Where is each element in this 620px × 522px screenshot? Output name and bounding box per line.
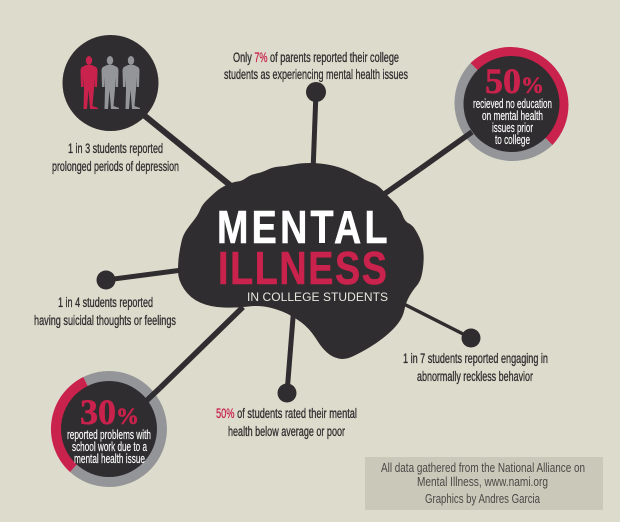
text: parents line 1: Only 7% of parents reported their college — [233, 50, 399, 65]
inner circle — [464, 56, 560, 152]
brain silhouette — [178, 163, 424, 359]
panel: 30% school work — [51, 371, 167, 487]
text: line 1: reported problems with — [67, 427, 151, 442]
text: reckless line 1: 1 in 7 students reported engaging in — [403, 351, 548, 366]
panel: only 7% of parents — [224, 50, 408, 102]
title: illness: ILLNESS — [218, 242, 387, 294]
text: line 4: to college — [495, 132, 530, 147]
title: mental: MENTAL — [217, 201, 388, 253]
ring red segment — [470, 47, 568, 145]
connector: suicidal thoughts dot to brain — [106, 269, 190, 280]
connector stub over ring — [143, 388, 160, 404]
connector: 30% circle to brain — [160, 307, 243, 388]
panel: 50% no education — [420, 47, 568, 169]
text: source line 2: Mental Illness, www.nami.org — [417, 475, 548, 489]
ring gray segment — [70, 371, 167, 487]
panel: 1 in 3 students — [52, 35, 179, 174]
icon: red figure — [80, 56, 98, 109]
connector: depression circle to brain — [140, 112, 236, 190]
icon: dark circle — [62, 35, 158, 131]
text: graphics credit: Graphics by Andres Garcia — [425, 492, 540, 506]
panel: 50% of students rated — [216, 384, 357, 439]
icon: dot — [278, 384, 296, 402]
text: line 2: school work due to a — [72, 439, 147, 454]
icon: gray figure — [122, 56, 140, 109]
panel: 1 in 4 students — [34, 270, 176, 328]
text: line 1: recieved no education — [473, 96, 552, 111]
subtitle: IN COLLEGE STUDENTS — [247, 290, 388, 304]
connector: 50% circle to brain — [380, 169, 420, 197]
ring red segment — [51, 377, 109, 472]
connector stub over ring — [420, 132, 472, 169]
stat: 50%: 50% — [485, 61, 544, 101]
stat: 30%: 30% — [80, 392, 139, 432]
text: depression line 2: prolonged periods of depression — [52, 159, 179, 174]
connector: parents dot to brain — [313, 92, 316, 172]
inner circle — [61, 381, 157, 477]
icon: dot — [306, 82, 326, 102]
text: suicidal line 2: having suicidal thoughts or feelings — [34, 313, 176, 328]
connector: below average dot to brain — [287, 305, 294, 393]
connector: reckless behavior dot to brain — [392, 298, 471, 338]
panel: credits — [365, 457, 603, 510]
text: line 2: on mental health — [482, 108, 543, 123]
text: parents line 2: students as experiencing mental health issues — [224, 67, 408, 82]
text: suicidal line 1: 1 in 4 students reported — [58, 295, 153, 310]
text: depression line 1: 1 in 3 students reported — [68, 141, 163, 156]
ring gray segment — [455, 63, 552, 161]
text: rated line 1: 50% of students rated their mental — [216, 406, 357, 421]
text: line 3: mental health issue — [74, 451, 145, 466]
text: reckless line 2: abnormally reckless behavior — [417, 369, 533, 384]
panel: 1 in 7 students — [403, 328, 548, 384]
text: line 3: issues prior — [492, 120, 533, 135]
icon: gray figure — [102, 56, 119, 109]
icon: dot — [96, 270, 116, 290]
credits background — [365, 457, 603, 510]
brain with title — [178, 163, 424, 359]
icon: dot — [462, 328, 480, 348]
text: rated line 2: health below average or poor — [228, 424, 345, 439]
